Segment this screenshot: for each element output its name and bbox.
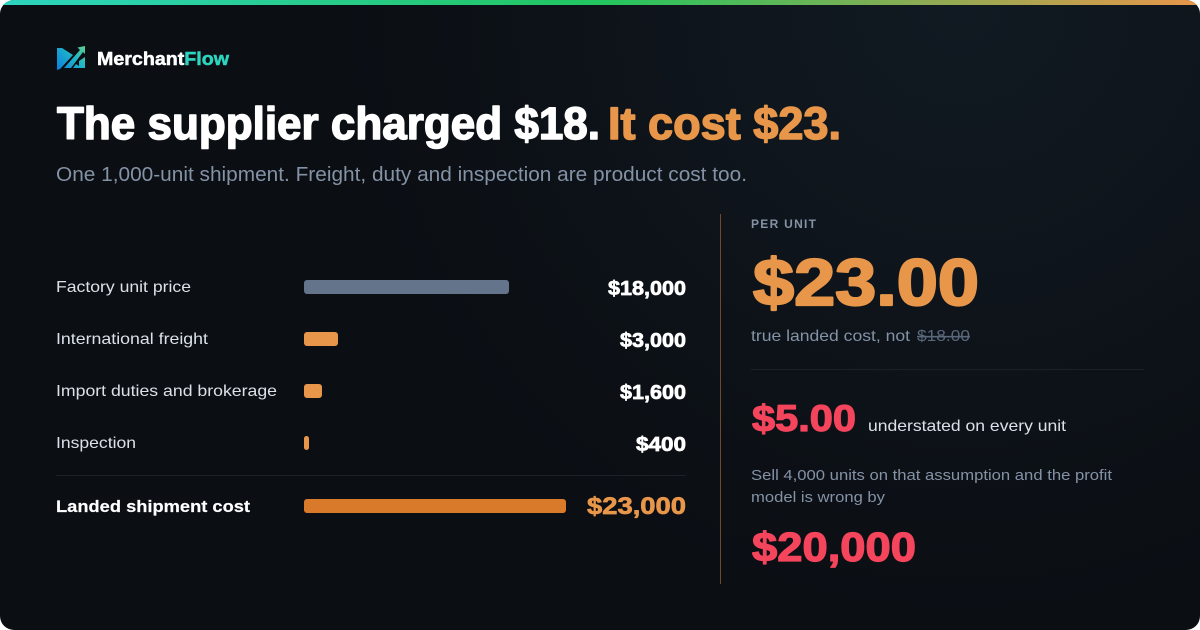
brand name: Merchant Flow [97, 49, 230, 69]
explanation text: Sell 4,000 units on that assumption and the profit [751, 467, 1113, 484]
explanation text [751, 467, 1113, 506]
panel: cost breakdown chart [56, 278, 686, 520]
logo [57, 46, 230, 70]
understated amount [752, 398, 1067, 439]
row: landed shipment cost total: $23,000 [587, 493, 686, 520]
title: orange part: It cost $23. [608, 98, 841, 149]
row: import duties and brokerage [56, 382, 686, 404]
row: landed shipment cost total: Landed shipment cost [56, 497, 250, 516]
row: inspection: $400 [636, 434, 686, 456]
total error amount: $20,000 [752, 524, 916, 570]
row: inspection [56, 434, 686, 456]
title [57, 98, 841, 149]
row: factory unit price: Factory unit price [56, 279, 191, 296]
title: white part: The supplier charged $18. [57, 98, 600, 149]
row: inspection: Inspection [56, 435, 136, 452]
understated amount: understated on every unit [868, 418, 1067, 435]
panel: per unit summary [751, 217, 1144, 570]
row: international freight [56, 330, 686, 352]
understated amount: $5.00 [752, 398, 856, 439]
row: factory unit price: $18,000 [608, 278, 686, 300]
row: international freight: International freight [56, 331, 209, 348]
explanation text: model is wrong by [751, 489, 886, 506]
caption: true landed cost: $18.00 [917, 328, 970, 345]
icon: merchantflow mark [57, 46, 85, 70]
big number: per unit cost: $23.00 [753, 245, 979, 319]
caption: true landed cost: true landed cost, not [751, 328, 911, 345]
row: import duties and brokerage: $1,600 [620, 382, 686, 404]
row: import duties and brokerage: Import duties and brokerage [56, 383, 277, 400]
row: international freight: $3,000 [620, 330, 686, 352]
caption: true landed cost [751, 328, 970, 345]
eyebrow label: PER UNIT [751, 217, 817, 231]
subtitle: One 1,000-unit shipment. Freight, duty and inspection are product cost too. [56, 164, 747, 186]
row: factory unit price [56, 278, 686, 300]
row: landed shipment cost total [56, 493, 686, 520]
